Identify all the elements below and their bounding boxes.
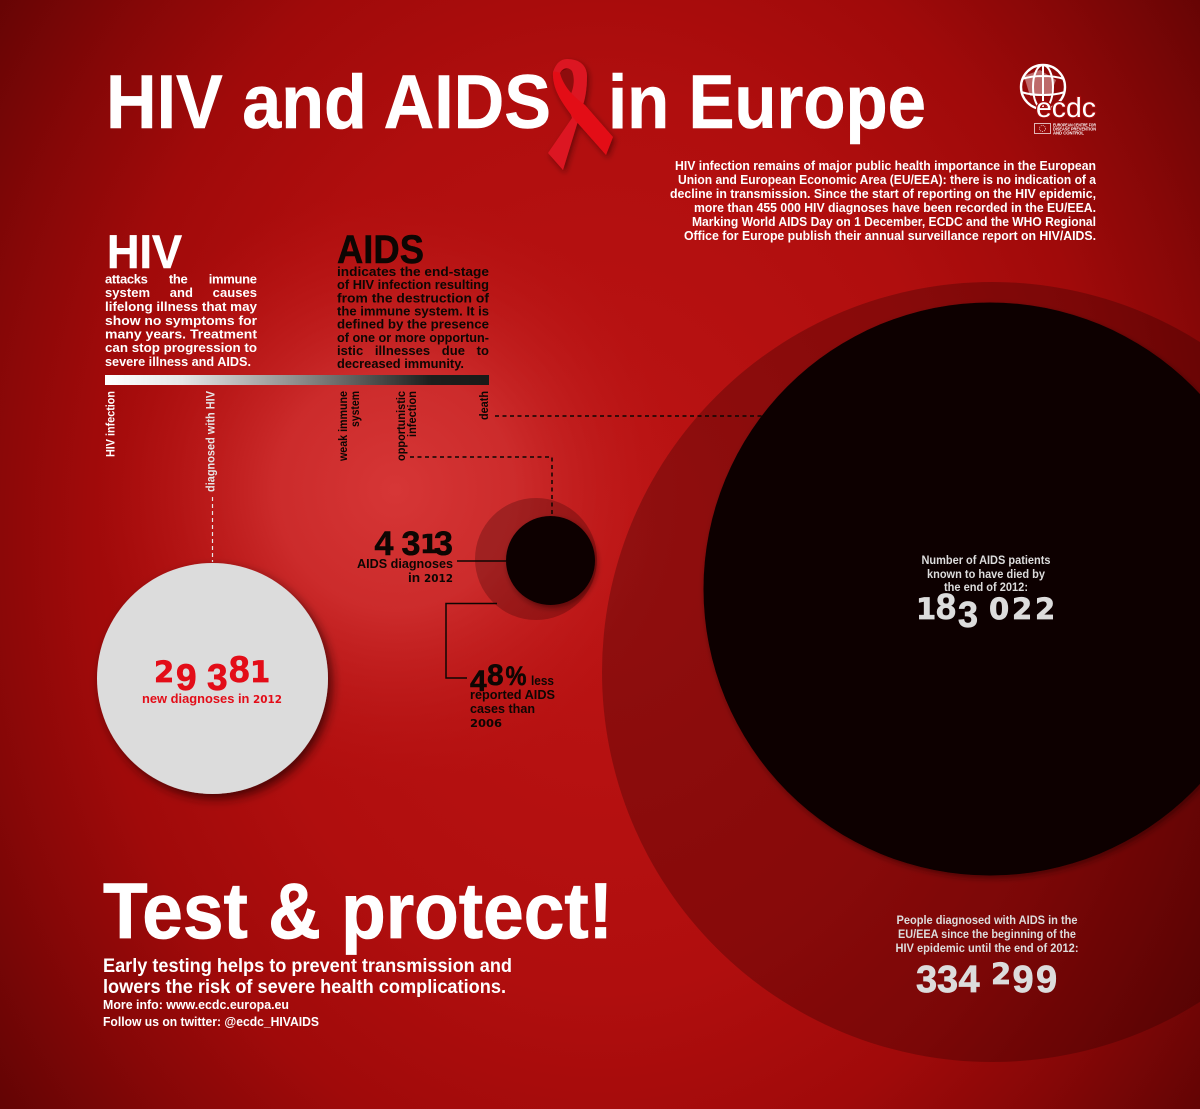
intro text: more than 455 000 HIV diagnoses have been recorded in the EU/EEA. [694,200,1096,215]
intro text: Office for Europe publish their annual surveillance report on HIV/AIDS. [684,228,1096,243]
label: HIV infection: HIV infection [104,391,118,457]
intro text: Union and European Economic Area (EU/EEA): there is no indication of a [678,172,1097,187]
caption: cases than [470,701,535,716]
EU flag box [1034,124,1050,134]
number: 4 [470,665,487,698]
HIV text block: many years. Treatment [105,326,258,342]
stat: 334 299 diagnosed [896,913,1078,1001]
label: opportunistic infection [394,391,419,461]
big black circle: AIDS deaths [704,302,1200,876]
caption: AIDS diagnoses [357,556,453,571]
logo caption: EUROPEAN CENTRE FOR [1053,122,1097,128]
intro text: Marking World AIDS Day on 1 December, ECDC and the WHO Regional [692,214,1096,229]
HIV text block: severe illness and AIDS. [105,354,251,369]
label: opportunistic infection: opportunistic [394,391,408,461]
number: 2 [154,655,174,689]
number: 2 [1012,592,1032,626]
EU stars [1040,126,1046,132]
number: 9 [176,657,197,698]
caption: less [531,673,554,688]
caption: known to have died by [927,567,1045,581]
label: death: death [477,391,491,420]
caption: in [408,570,424,585]
big outer circle: people diagnosed with AIDS [602,282,1200,1062]
more info links: Follow us on twitter: @ecdc_HIVAIDS [103,1014,319,1029]
number: 1 [420,530,438,560]
heading: HIV: HIV [107,225,183,278]
small outer circle [475,498,597,620]
heading: Test and protect: Test & protect! [103,866,613,955]
icon: globe [1021,65,1065,109]
caption: Number of AIDS patients [922,553,1051,567]
label: weak immune system: system [348,391,362,427]
HIV text block: can stop progression to [105,340,257,355]
grey circle: new diagnoses [97,563,328,794]
stat: 4 313 AIDS diagnoses [357,525,453,585]
caption: 2012 [253,694,282,706]
AIDS text block: the immune system. It is [337,304,489,318]
intro text: HIV infection remains of major public health importance in the European [675,158,1096,173]
caption: reported AIDS [470,687,555,702]
label: weak immune system [336,391,362,462]
caption: new diagnoses in [142,691,253,706]
number: 4 [374,525,394,563]
AIDS text block: indicates the end-stage [337,264,489,279]
AIDS text block: of one or more opportun- [337,330,489,345]
panel: AIDS definition [337,228,490,371]
number: 2 [991,957,1011,991]
number: 4 [958,959,980,1001]
heading: AIDS: AIDS [337,228,424,272]
number: 2 [1035,592,1055,626]
panel: HIV definition [105,225,258,369]
number: 1 [916,592,936,626]
caption: EU/EEA since the beginning of the [898,927,1076,941]
connector: 48 percent bracket [446,604,497,678]
connector: diagnosed to grey circle [212,497,214,562]
small black circle: AIDS diagnoses [506,516,595,605]
AIDS text block: of HIV infection resulting [337,277,489,292]
caption: 2006 [470,717,502,730]
connector: death to big circle [495,415,762,417]
caption: People diagnosed with AIDS in the [896,913,1078,927]
connector: AIDS diagnoses [457,560,506,562]
stat: 29 381 new diagnoses [142,649,282,706]
number: 8 [487,659,504,692]
HIV text block: system and causes [105,285,257,300]
caption: the end of 2012: [944,580,1028,594]
HIV text block: lifelong illness that may [105,299,258,314]
title: in Europe [608,60,926,145]
icon: red ribbon [548,59,613,170]
number: 3 [937,959,958,1001]
stat: 183 022 deaths [916,553,1055,635]
HIV text block: show no symptoms for [105,313,257,328]
number: 8 [229,649,250,690]
number: 3 [402,525,420,563]
call to action text: lowers the risk of severe health complications. [103,977,506,998]
connector: opportunistic infection to small circle [410,457,552,516]
title: HIV and AIDS [106,60,551,145]
HIV text block: attacks the immune [105,272,257,286]
logo: ecdc [1021,65,1097,136]
number: 3 [434,525,453,563]
label: opportunistic infection: infection [405,391,419,437]
caption: 2012 [424,573,453,585]
number: 9 [1036,959,1057,1001]
number: 0 [989,592,1009,626]
AIDS text block: istic illnesses due to [337,343,489,358]
stat: 48 percent less [470,659,555,730]
number: 3 [916,959,937,1001]
AIDS text block: from the destruction of [337,290,490,306]
number: 9 [1012,959,1034,1001]
caption: HIV epidemic until the end of 2012: [896,941,1078,955]
more info links: More info: www.ecdc.europa.eu [103,997,289,1012]
call to action text: Early testing helps to prevent transmission and [103,956,512,977]
wordmark: ecdc [1036,92,1096,123]
label: diagnosed with HIV: diagnosed with HIV [204,391,218,492]
AIDS text block: defined by the presence [337,316,489,332]
number: 1 [250,655,270,689]
logo caption: AND CONTROL [1053,130,1084,136]
intro text: decline in transmission. Since the start of reporting on the HIV epidemic, [670,186,1096,201]
AIDS text block: decreased immunity. [337,356,464,371]
progression gradient bar [105,375,489,385]
number: 8 [936,586,956,627]
number: % [506,661,526,691]
number: 3 [958,594,978,635]
logo caption: DISEASE PREVENTION [1053,126,1096,132]
number: 3 [207,657,228,698]
label: weak immune system: weak immune [336,391,350,462]
